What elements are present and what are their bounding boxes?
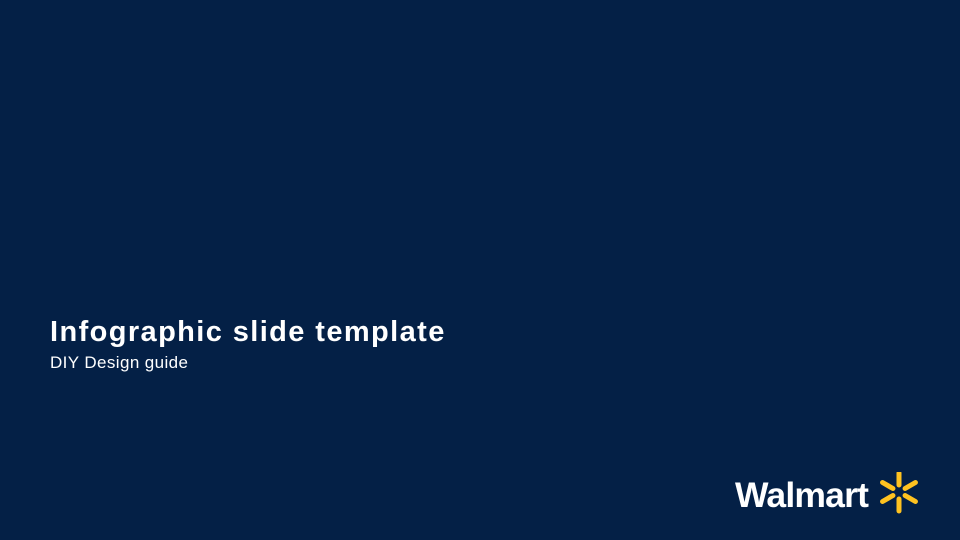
logo: Walmart: Walmart [735, 475, 869, 515]
logo: Walmart [735, 472, 918, 515]
title: Infographic slide template [50, 316, 446, 348]
subtitle: DIY Design guide [50, 353, 188, 372]
